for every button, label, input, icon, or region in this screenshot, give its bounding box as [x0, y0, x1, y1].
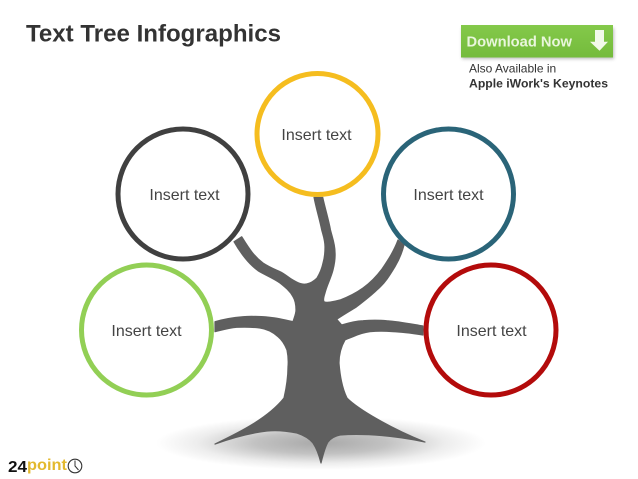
tree	[215, 197, 425, 463]
availability note	[469, 62, 608, 90]
logo: 24point: point	[27, 457, 68, 474]
logo: 24point: 24	[8, 459, 27, 476]
availability note: Also Available in	[469, 62, 556, 76]
tree shadow	[156, 416, 486, 470]
circle: green: Insert text	[111, 323, 182, 340]
icon: down arrow	[590, 30, 608, 51]
circle: red	[426, 265, 556, 395]
icon: clock	[68, 459, 82, 473]
circle: dark grey	[118, 129, 248, 259]
availability note: Apple iWork's Keynotes	[469, 78, 608, 90]
circle: red: Insert text	[456, 323, 527, 340]
download button	[461, 25, 614, 59]
circle: teal: Insert text	[413, 187, 484, 204]
circle: dark grey: Insert text	[149, 187, 220, 204]
circle: yellow	[257, 74, 378, 194]
circle: yellow: Insert text	[281, 127, 352, 144]
logo: 24point	[8, 457, 82, 476]
circle: teal	[384, 129, 514, 259]
download button: Download Now	[466, 34, 573, 50]
title: Text Tree Infographics	[26, 20, 281, 48]
circle: green	[82, 265, 212, 395]
